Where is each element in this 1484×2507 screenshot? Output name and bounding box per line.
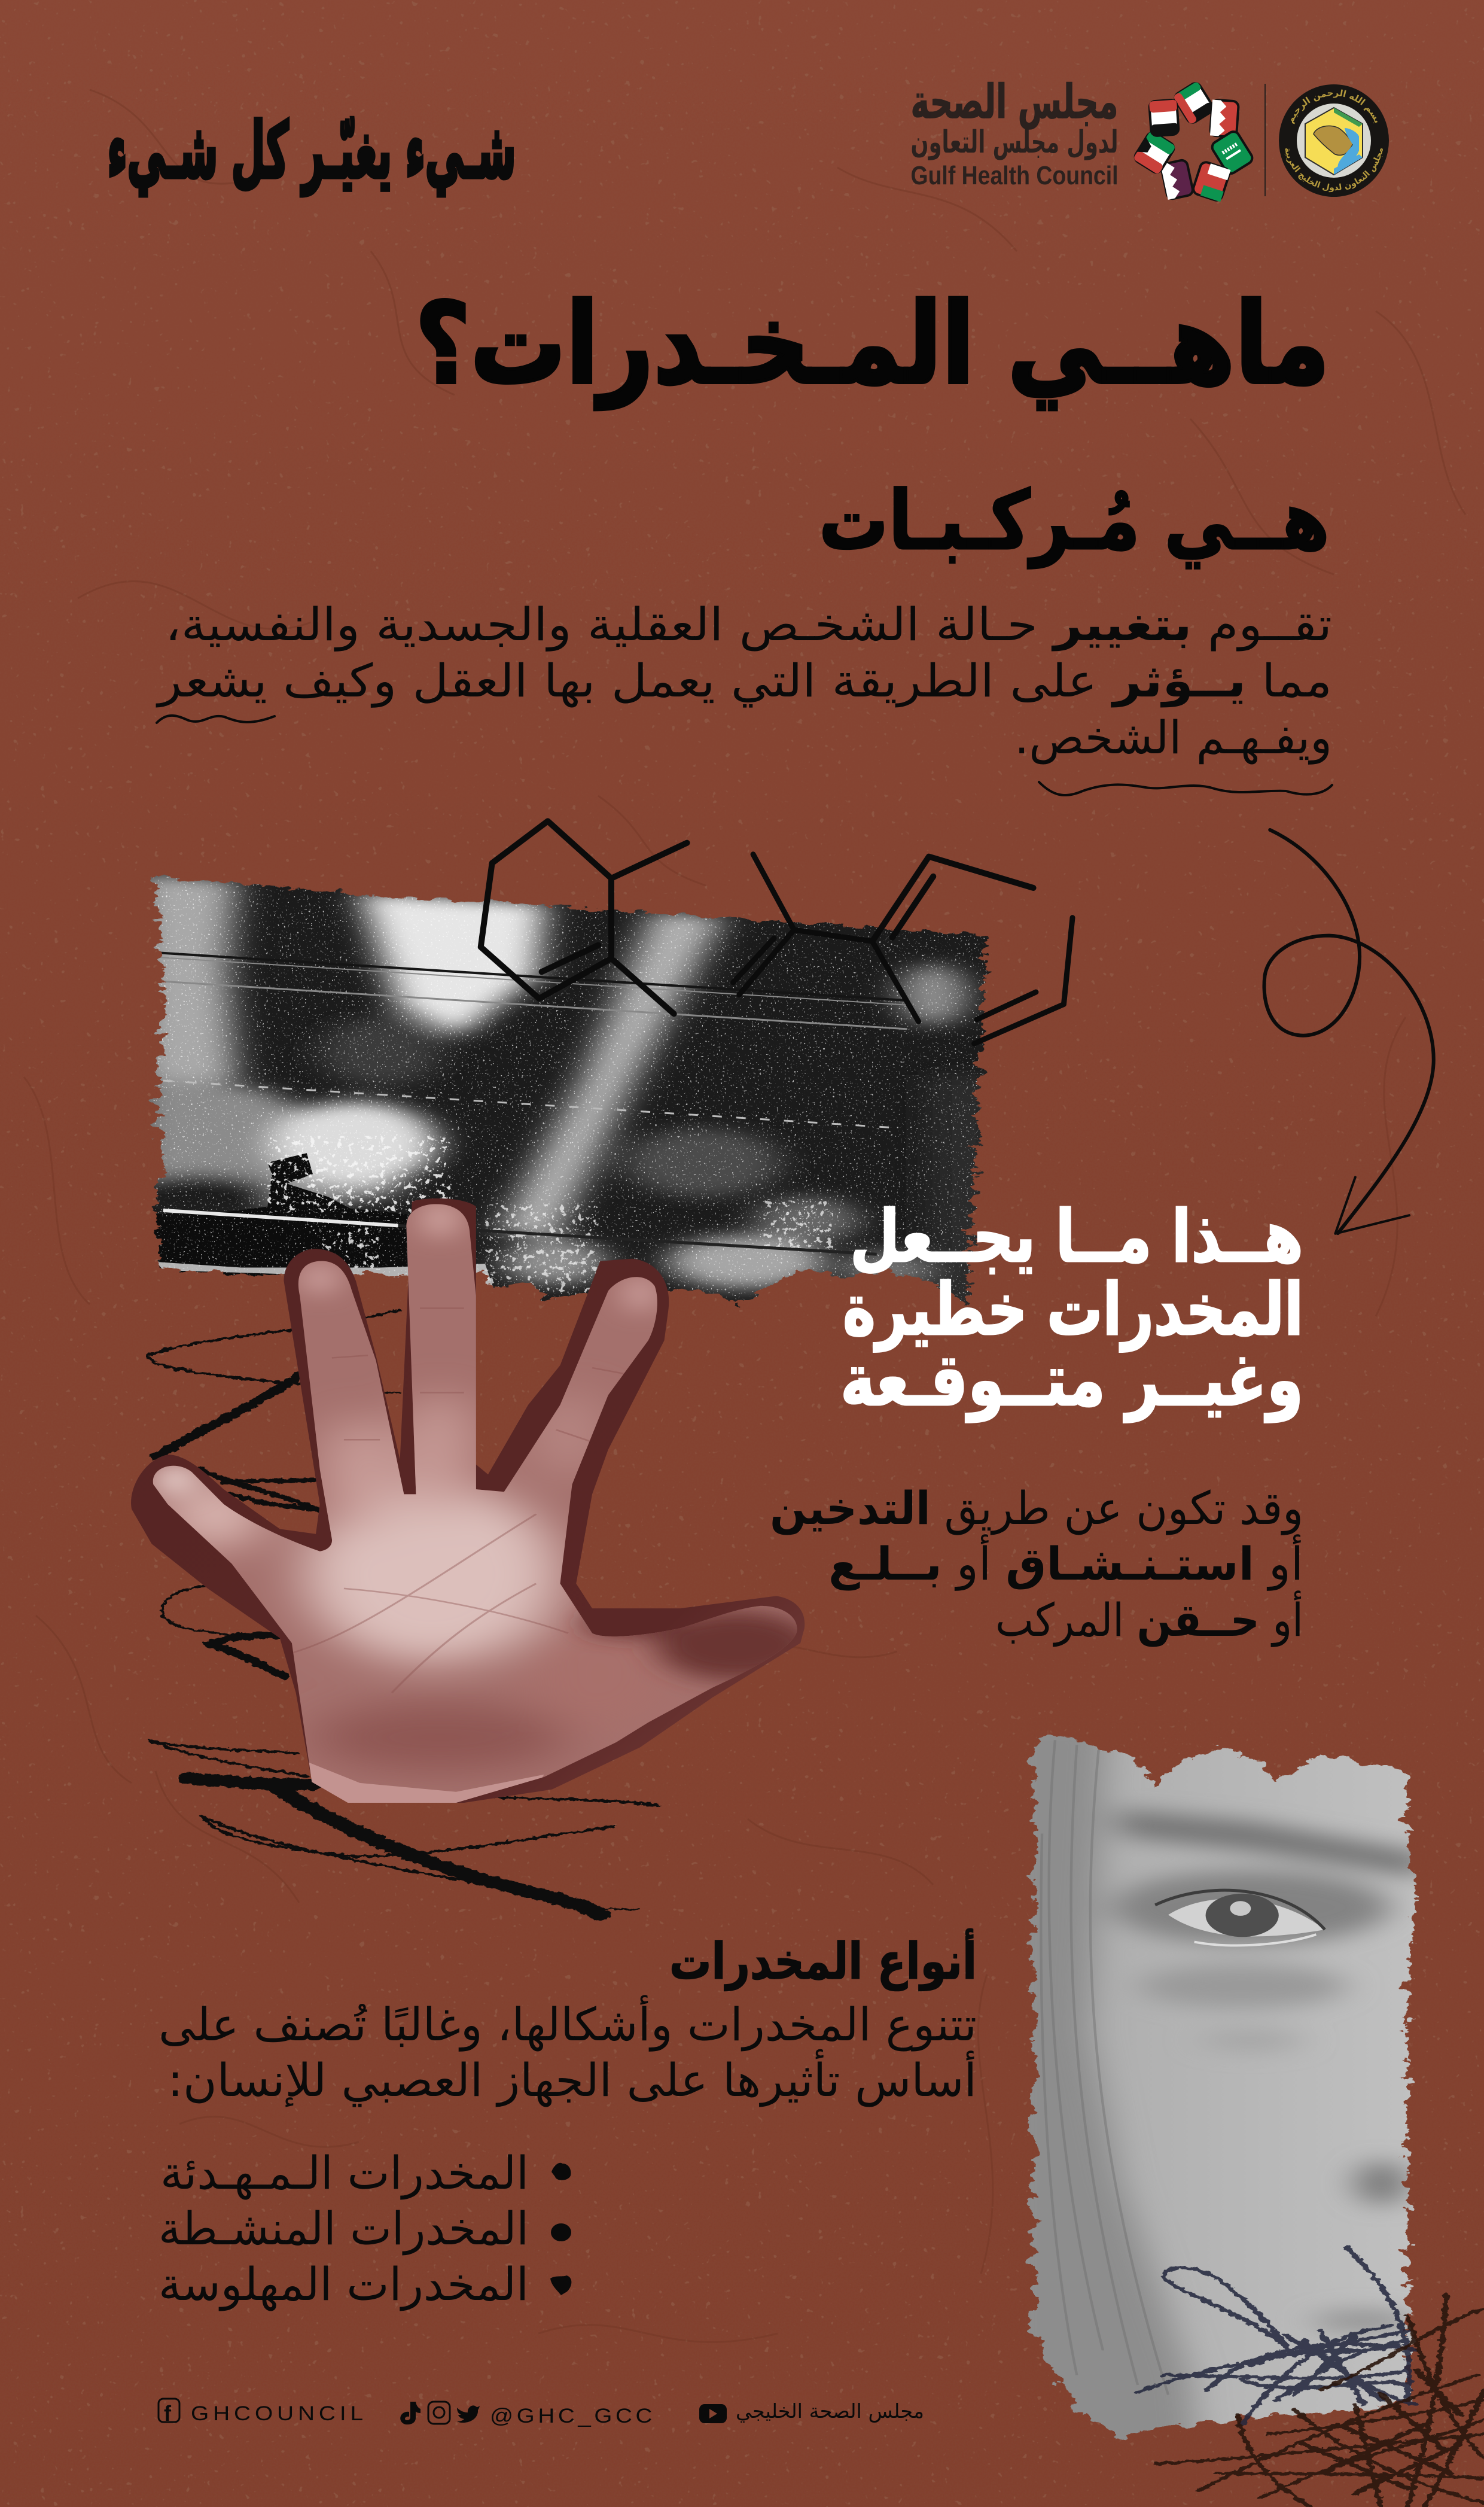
molecule structure drawing [481, 821, 1072, 1043]
icon: facebook: f [164, 2401, 172, 2426]
pen scribble, corner (dark brown) [1155, 2294, 1484, 2507]
intro paragraph [156, 598, 1332, 765]
section heading: types: أنواع المخدرات [669, 1928, 977, 1991]
list of drug types: المخدرات المنشـطة [159, 2202, 529, 2256]
types paragraph: تتنوع المخدرات وأشكالها، وغالبًا تُصنف على [159, 1995, 977, 2052]
methods paragraph [770, 1481, 1303, 1647]
intro paragraph: ويفـهـم الشخص. [1014, 711, 1332, 765]
handle: facebook: GHCOUNCIL [191, 2402, 367, 2425]
campaign slogan calligraphy: شـيء يغيّـر كل شـيء [108, 107, 516, 196]
logo text lines: مجلس الصحة [910, 75, 1119, 129]
methods paragraph: أو استـنـشـاق أو بــلـع [828, 1534, 1303, 1591]
eye [1155, 1890, 1325, 1945]
handle: youtube: مجلس الصحة الخليجي [736, 2399, 924, 2423]
logo text lines: Gulf Health Council [910, 161, 1119, 190]
icon: facebook [159, 2399, 179, 2426]
hand-drawn underlines [157, 716, 1332, 795]
panel: torn grunge photo [148, 875, 992, 1308]
icon: youtube [699, 2404, 727, 2423]
intro paragraph: تقــوم بتغيير حـالة الشخـص العقلية والجسدية والنفسية، [165, 598, 1332, 652]
white headline: وغيــر متــوقـعة [840, 1339, 1303, 1423]
white headline: المخدرات خطيرة [843, 1268, 1303, 1352]
white headline [840, 1195, 1303, 1423]
list bullets [550, 2163, 571, 2295]
subtitle: هــي مُـركـبـات [819, 474, 1330, 568]
intro paragraph: مما يــؤثر على الطريقة التي يعمل بها العقل وكيف يشعر [156, 654, 1332, 708]
logo: Gulf Health Council [910, 75, 1389, 202]
icon: instagram [428, 2402, 450, 2424]
flag star [1133, 81, 1254, 202]
pen scribble on face (navy) [1138, 2247, 1416, 2424]
hand halo outline [131, 1198, 805, 1803]
GCC emblem: مجلس التعاون لدول الخليج العربية [1285, 148, 1383, 193]
title: ماهــي المـخـدرات؟ [415, 279, 1330, 409]
logo text lines [910, 75, 1119, 190]
methods paragraph: وقد تكون عن طريق التدخين [770, 1481, 1303, 1535]
list of drug types: المخدرات الـمـهـدئة [160, 2146, 529, 2200]
white headline: هــذا مــا يجــعل [850, 1195, 1303, 1279]
hand photo cut-out [120, 1197, 840, 1817]
icon: tiktok [400, 2402, 420, 2424]
methods paragraph: أو حــقن المركب [995, 1590, 1303, 1647]
list of drug types [159, 2146, 571, 2311]
handle: x / instagram / tiktok: @GHC_GCC [490, 2405, 656, 2427]
scribble behind the hand [148, 1310, 658, 1915]
footer social handles [159, 2399, 924, 2427]
hand skin [153, 1204, 797, 1803]
logo text lines: لدول مجلس التعاون [910, 124, 1119, 160]
types paragraph [159, 1995, 977, 2107]
GCC emblem [1279, 84, 1389, 197]
list of drug types: المخدرات المهلوسة [159, 2257, 529, 2311]
types paragraph: أساس تأثيرها على الجهاز العصبي للإنسان: [167, 2049, 977, 2107]
GCC emblem: بسم الله الرحمن الرحيم [1291, 90, 1378, 124]
logo separator [1264, 84, 1266, 196]
curved arrow [1264, 830, 1434, 1234]
icon: twitter [457, 2405, 480, 2423]
panel: torn face photo [998, 1720, 1451, 2459]
